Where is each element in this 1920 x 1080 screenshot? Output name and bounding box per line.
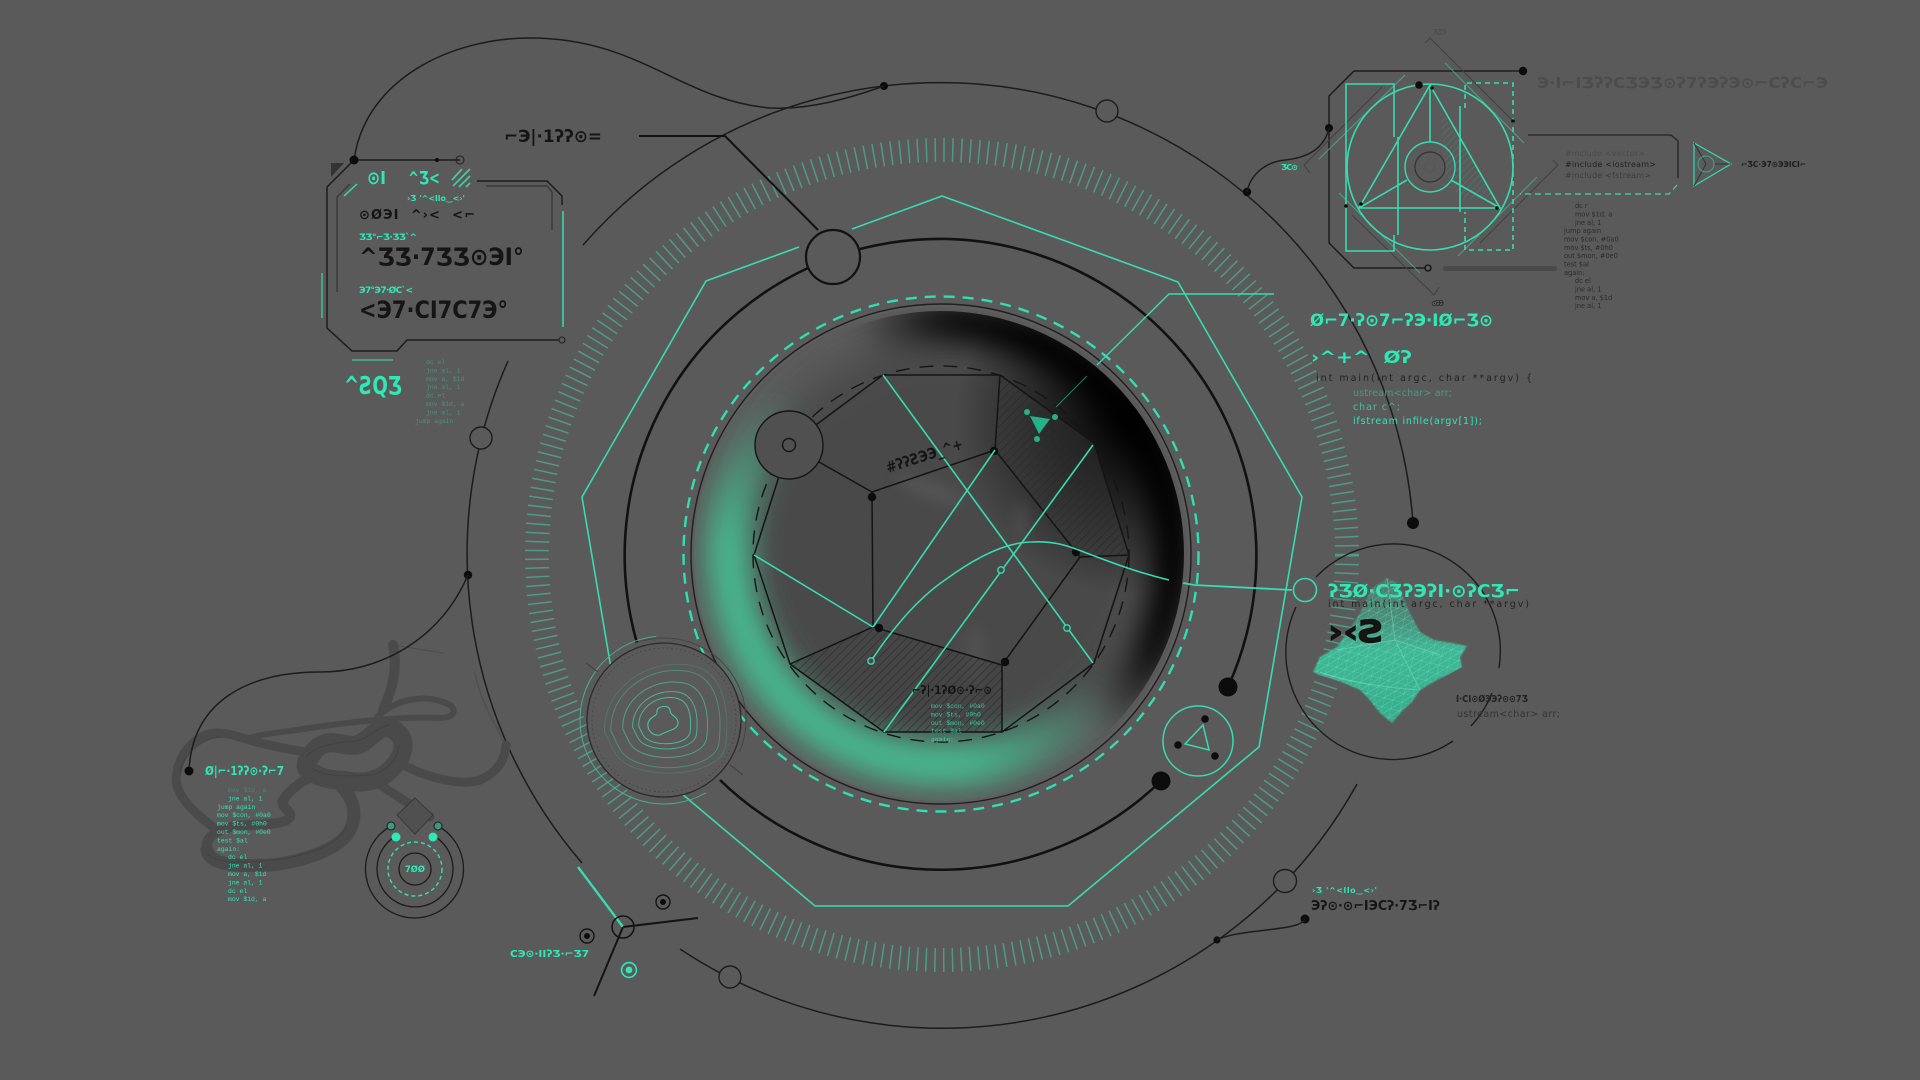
diamond xyxy=(397,798,433,834)
assembly code: dc r xyxy=(1575,202,1588,210)
leader from title to hub xyxy=(639,136,818,230)
light diagonal accents xyxy=(1319,63,1537,273)
panel heading 2: ^Ʒ< xyxy=(408,168,440,189)
bottom-right label group xyxy=(1217,886,1440,940)
connector curve xyxy=(354,38,884,160)
knot code: dc el xyxy=(228,888,247,895)
terrain big label: ›‹Ƨ xyxy=(1328,615,1385,650)
assembly code: mov $ts, #0h0 xyxy=(1564,244,1613,252)
target teal xyxy=(622,963,636,977)
dashed teal ring xyxy=(684,296,1198,812)
open node xyxy=(1425,265,1431,271)
teal sight lines xyxy=(754,375,1292,732)
assembly code: mov a, $1d xyxy=(1575,294,1612,302)
panel: top-right schematic xyxy=(1247,27,1828,310)
teal dots xyxy=(392,832,438,842)
caption: CЭ⊙·IIʔƷ·⌐Ʒ7 xyxy=(510,949,589,960)
heading: right column title: Ø⌐7·ʔ⊙7⌐ʔЭ·IØ⌐Ʒ⊙ xyxy=(1310,311,1493,331)
knot code: mov $1d, a xyxy=(228,896,267,903)
inner ring xyxy=(399,853,431,885)
knot code: jump again xyxy=(217,804,256,811)
include connector dashed xyxy=(1520,185,1677,194)
knot of strands xyxy=(176,645,506,866)
sphere xyxy=(680,290,1200,820)
black arms xyxy=(594,918,698,996)
open node markers xyxy=(868,567,1070,664)
terrain caption: I·CI⊙ØЭЭʔ⊙⊙7Ʒ xyxy=(1456,694,1528,705)
emblem caption: ⌐ƷC·Э7⊙ЭЭICI⌐ xyxy=(1741,160,1806,169)
code block: int main(int argc, char **argv) { xyxy=(1316,373,1532,384)
black ring segments xyxy=(625,239,1256,870)
inner hub xyxy=(1405,142,1455,192)
code block: ustream<char> arr; xyxy=(1353,388,1452,399)
assembly code: jump again xyxy=(1563,227,1601,235)
knot code: test $al xyxy=(217,837,248,844)
hatched region code: out $mon, #0e0 xyxy=(931,720,985,727)
knot code: jne al, 1 xyxy=(228,863,263,870)
triangle and spokes xyxy=(1359,85,1500,235)
frame nodes xyxy=(350,156,565,343)
label: Эʔ⊙·⊙⌐IЭCʔ·7Ʒ⌐Iʔ xyxy=(1311,899,1440,914)
title top-left: ⌐Э|·1ʔʔ⊙= xyxy=(504,127,602,147)
target right xyxy=(656,895,670,909)
include block: #include <fstream> xyxy=(1565,171,1651,180)
faint teal side bar xyxy=(322,273,393,360)
terrain code caption: ustream<char> arr; xyxy=(1457,709,1560,720)
orbit nodes xyxy=(464,82,1419,988)
teal arm xyxy=(578,867,623,927)
assembly code xyxy=(1563,202,1619,310)
hatched region code: mov $con, #0a0 xyxy=(931,703,985,710)
faint code column: jump again xyxy=(415,418,454,425)
grey bar xyxy=(1443,266,1557,271)
faint code column: jne al, 1 xyxy=(426,384,461,391)
contour map disc xyxy=(549,605,779,835)
corner triangle xyxy=(331,163,344,177)
assembly code: jne al, 1 xyxy=(1574,219,1601,227)
connector xyxy=(1247,128,1329,192)
teal rectangles xyxy=(1346,84,1394,251)
connector xyxy=(1217,919,1305,940)
teal accents xyxy=(344,184,563,327)
ring junction dots xyxy=(1152,678,1238,790)
hatch block xyxy=(452,169,470,187)
latitude label: ƷƷ°⌐Ʒ·ƷƷ`^ xyxy=(359,232,417,243)
knot code: mov $1d, a xyxy=(228,787,267,794)
top faint label: 7ØЭ xyxy=(1432,27,1446,37)
heading: right column subtitle: ›^+^ Øʔ xyxy=(1311,348,1412,368)
knot code: again: xyxy=(217,846,240,853)
knot code: mov $ts, #0h0 xyxy=(217,821,267,828)
faint code column: dc el xyxy=(426,393,445,400)
assembly code: dc el xyxy=(1575,277,1591,285)
hatched region code: mov $ts, #0h0 xyxy=(931,711,981,718)
assembly code: test $al xyxy=(1564,260,1589,268)
panel heading: ⊙I xyxy=(367,168,386,189)
longitude value: <Э7·CI7C7Э° xyxy=(359,296,508,324)
inner frame xyxy=(337,184,552,292)
assembly code: out $mon, #0e0 xyxy=(1564,252,1618,260)
main circle xyxy=(1347,84,1513,250)
row text: ⊙ØЭI ^›< <⌐ xyxy=(359,208,475,223)
decagon wireframe xyxy=(754,375,1129,732)
hatched region caption: ⌐ʔ|·1ʔØ⊙·ʔ⌐⊙ xyxy=(912,683,992,697)
dial value: 7ØØ xyxy=(405,864,425,875)
code block xyxy=(1316,373,1532,427)
top hub circle xyxy=(806,230,860,284)
triangle widget xyxy=(1163,706,1233,776)
knot code: out $mon, #0e0 xyxy=(217,829,271,836)
knot connector curve xyxy=(189,575,468,771)
knot code: mov $con, #0a0 xyxy=(217,812,271,819)
panel: top-left data readout xyxy=(322,38,884,360)
faint code column: jne al, 1 xyxy=(426,367,461,374)
knot code: jne al, 1 xyxy=(228,795,263,802)
3D terrain mesh xyxy=(1313,578,1467,723)
teal nonagon frame xyxy=(582,196,1302,906)
tripod widget xyxy=(510,867,698,996)
frame and corner dots xyxy=(1325,67,1527,210)
faint title: Э·I⌐IƷʔʔCƷЭƷ⊙ʔ7ʔЭʔЭ⊙⌐CʔC⌐Э xyxy=(1537,74,1828,92)
hatched sector xyxy=(1440,110,1497,200)
lens circle on decagon xyxy=(755,411,823,479)
terminal rings xyxy=(387,822,442,830)
outer thin orbit arcs xyxy=(467,83,1413,1028)
assembly code: mov $1d, a xyxy=(1575,210,1612,218)
knot title: Ø|⌐·1ʔʔ⊙·ʔ⌐7 xyxy=(205,764,284,778)
knot code: jne al, 1 xyxy=(228,879,263,886)
latitude value: ^ƷƷ·7ƷƷ⊙ЭI° xyxy=(359,243,524,271)
assembly code: mov $con, #0a0 xyxy=(1564,236,1619,244)
panel frame xyxy=(327,160,562,351)
teal triangle marker xyxy=(1024,409,1058,442)
quote: ›Ʒ '^<llo‿<›' xyxy=(1312,886,1377,895)
wireframe nodes xyxy=(868,447,1080,666)
assembly code: jne al, 1 xyxy=(1574,302,1601,310)
inner dashed circle xyxy=(753,366,1129,742)
code block: char c^; xyxy=(1353,402,1400,413)
longitude label: Э7°Э7·ØC`< xyxy=(359,285,413,296)
include block: #include <vector> xyxy=(1565,149,1645,158)
knot code: dc el xyxy=(228,854,247,861)
faint diagonal diamond xyxy=(1304,38,1558,295)
bottom label: ⊙ЭЭ xyxy=(1431,299,1444,308)
faint code column: dc el xyxy=(426,359,445,366)
dashed ring xyxy=(388,842,442,896)
faint code column: mov a, $1d xyxy=(426,376,465,383)
hatched region code: again: xyxy=(931,737,954,744)
node xyxy=(1300,914,1310,924)
arcs xyxy=(366,826,464,918)
tick ring xyxy=(537,150,1347,960)
include block xyxy=(1565,149,1656,180)
assembly code: jne al, 1 xyxy=(1574,286,1601,294)
teal node ring xyxy=(1294,578,1316,602)
target dial xyxy=(366,798,464,918)
triangle emblem xyxy=(1694,143,1731,186)
hatched region code: test $al xyxy=(931,728,962,735)
terrain code line: int main(int argc, char **argv) xyxy=(1328,599,1529,610)
include block: #include <iostream> xyxy=(1565,160,1656,169)
faint code column: mov $1d, a xyxy=(426,401,465,408)
knot node xyxy=(184,766,194,776)
target left xyxy=(580,929,594,943)
terrain heading: ʔƷØ·CƷʔЭʔI·⊙ʔCƷ⌐ xyxy=(1328,581,1520,602)
black frame xyxy=(1329,71,1523,268)
include connector solid xyxy=(1528,135,1678,178)
sphere label: #ʔʔƧЭЭ_^+ xyxy=(884,435,965,477)
code block: ifstream infile(argv[1]); xyxy=(1353,416,1482,427)
assembly code: again: xyxy=(1564,269,1584,277)
side heading: ^ƧQƷ xyxy=(344,371,402,400)
pointer from triangle to heading xyxy=(1056,294,1274,407)
knot code: mov a, $1d xyxy=(228,871,267,878)
schematic labels: ƷC⊙ xyxy=(1281,163,1298,172)
small quote: ›Ʒ '^<llo‿<›' xyxy=(407,194,465,203)
faint code column: jne al, 1 xyxy=(426,409,461,416)
terrain lens ring xyxy=(1286,544,1500,760)
hatched regions xyxy=(790,375,1129,732)
hub xyxy=(612,916,634,938)
knot strand texture xyxy=(180,725,399,862)
